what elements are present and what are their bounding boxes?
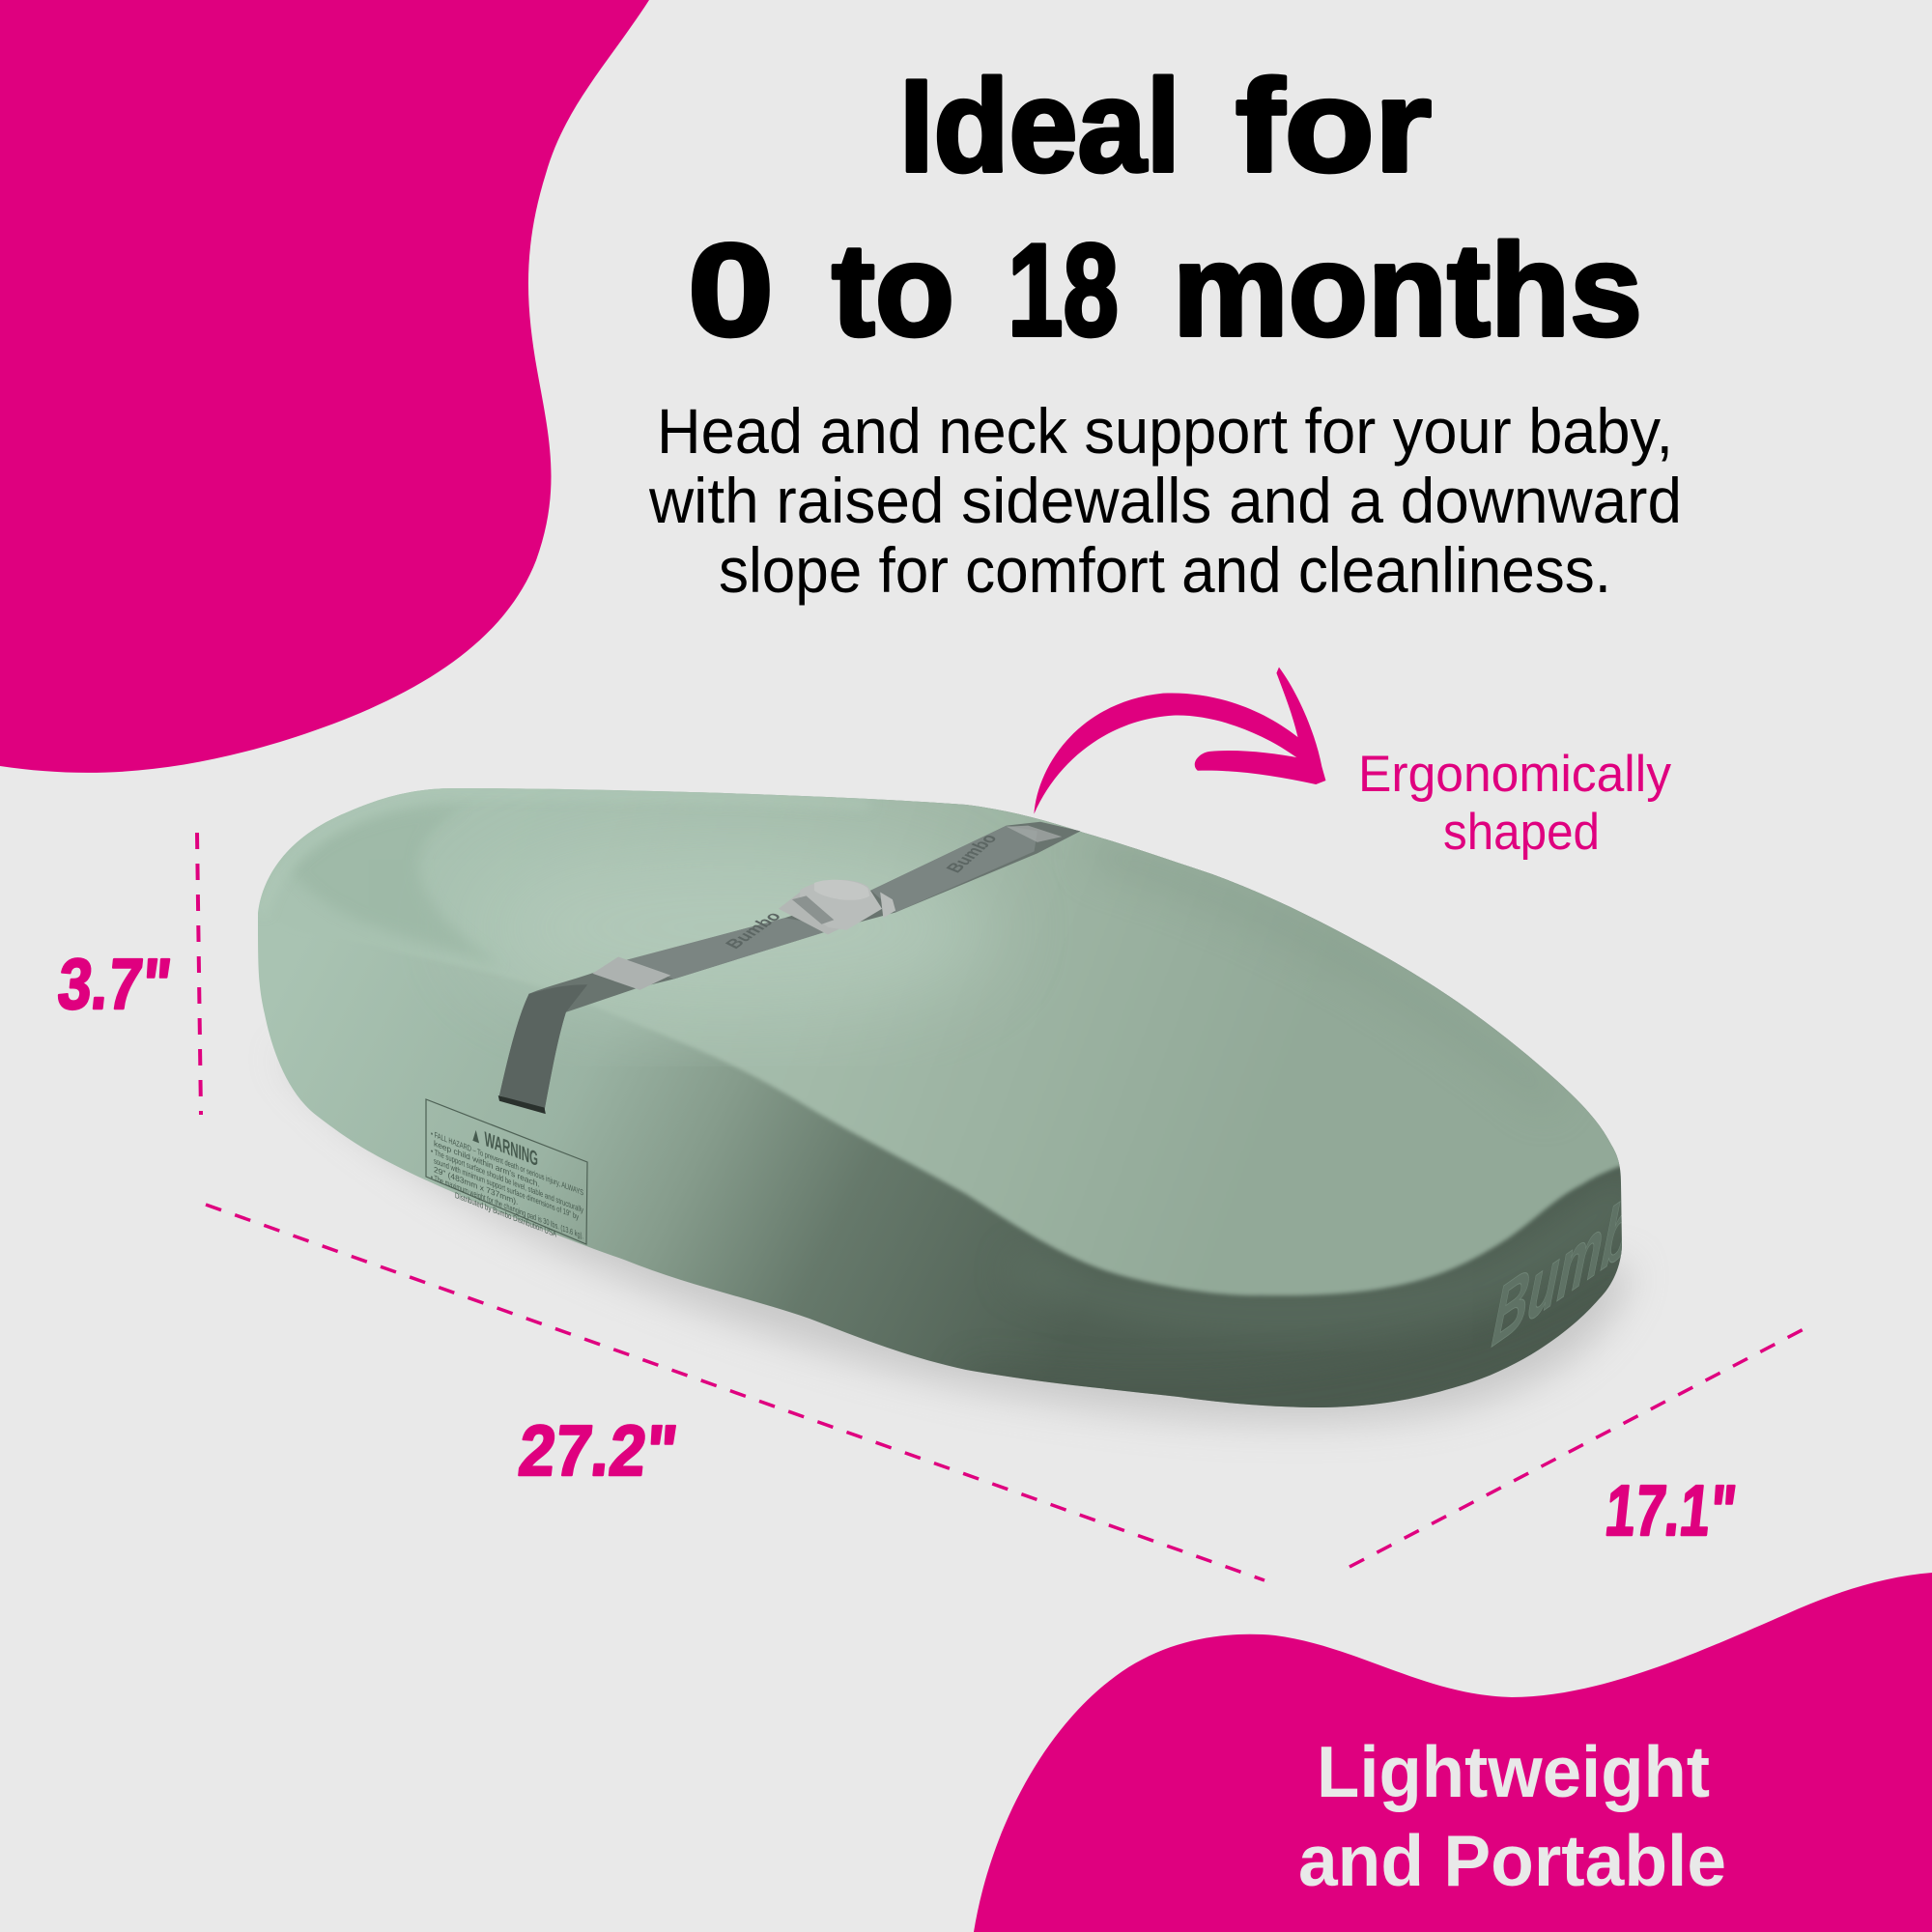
title: for <box>1236 52 1432 199</box>
warning label: Distributed by Bumbo Distribution USA <box>455 1190 556 1239</box>
title: 0 <box>688 216 774 363</box>
callout: ergonomically shaped: Ergonomically <box>1358 746 1671 803</box>
dimension line: height <box>197 833 201 1115</box>
warning label: 29" (483mm x 737mm). <box>434 1164 518 1207</box>
bowl inner shading <box>300 814 468 949</box>
body text: with raised sidewalls and a downward <box>648 465 1682 536</box>
buckle <box>779 880 895 935</box>
body text: slope for comfort and cleanliness. <box>719 534 1611 606</box>
title: Ideal <box>899 52 1180 199</box>
safety strap <box>498 822 1080 1114</box>
footer label: Lightweight <box>1317 1731 1710 1812</box>
blob: top-left pink <box>0 0 649 773</box>
dimension labels <box>54 944 1740 1550</box>
strap brand marks: Bumbo <box>942 832 1002 875</box>
footer label: and Portable <box>1298 1820 1726 1901</box>
pad shadow <box>280 1053 1633 1422</box>
callout: ergonomically shaped: shaped <box>1443 804 1600 861</box>
embossed brand text: Bumbo <box>1489 1155 1667 1366</box>
footer label <box>1298 1731 1726 1901</box>
warning label: keep child within arm's reach. <box>434 1138 540 1189</box>
dimension labels: 27.2" <box>515 1410 681 1491</box>
dimension line: width <box>1350 1329 1804 1567</box>
warning label: • FALL HAZARD – To prevent death or serious injury, ALWAYS <box>431 1128 583 1198</box>
rim edge highlight <box>263 792 869 913</box>
changing pad product <box>258 788 1622 1407</box>
callout: ergonomically shaped <box>1358 746 1671 861</box>
wall upper light on the right <box>1476 1214 1597 1288</box>
pad front wall <box>232 773 1642 1430</box>
warning label: sound with minimum support surface dimensions of 19" by <box>434 1155 579 1222</box>
body text <box>648 395 1682 606</box>
title <box>688 52 1642 363</box>
blob: bottom-right pink <box>974 1573 1932 1932</box>
strap brand marks: Bumbo <box>721 909 785 952</box>
pad top surface <box>232 773 1642 1295</box>
title: to <box>832 216 954 363</box>
bowl highlight <box>546 854 974 1009</box>
warning label: ▲ WARNING <box>470 1122 538 1171</box>
arrow <box>1034 668 1325 814</box>
strap slider <box>592 956 670 990</box>
body text: Head and neck support for your baby, <box>657 395 1673 467</box>
dimension labels: 3.7" <box>54 944 175 1024</box>
wall bottom darkening <box>966 1285 1633 1405</box>
title: 18 <box>1008 216 1119 363</box>
warning label: • The maximum weight for the changing pad is 30 lbs. (13.6 kg). <box>431 1172 583 1240</box>
dimension labels: 17.1" <box>1602 1470 1740 1550</box>
warning label: • The support surface should be level, stable and structurally <box>431 1146 583 1215</box>
right top shading <box>1092 850 1555 1101</box>
dimension line: length <box>206 1205 1264 1580</box>
title: months <box>1173 216 1642 363</box>
strap brand marks <box>721 832 1002 952</box>
warning label <box>426 1099 587 1250</box>
